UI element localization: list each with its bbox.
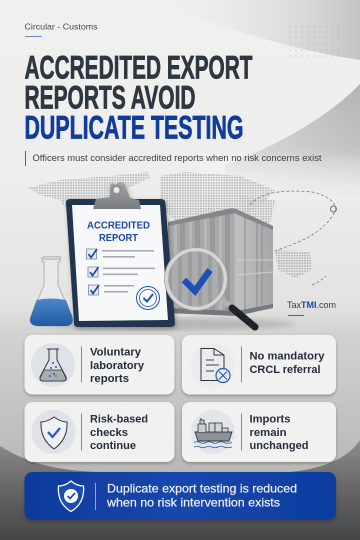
card: imports remain unchanged	[182, 402, 336, 462]
label: remain	[250, 427, 287, 439]
icon: cargo ship	[191, 410, 235, 454]
brand: TaxTMI.com	[287, 300, 336, 310]
label: Voluntary	[90, 346, 142, 358]
brand	[287, 300, 336, 316]
report heading	[87, 220, 150, 244]
dashed route	[250, 191, 336, 285]
banner text	[106, 482, 297, 510]
label: CRCL referral	[250, 364, 320, 376]
label: No mandatory	[250, 350, 325, 362]
icon: flask	[31, 343, 75, 387]
report heading: ACCREDITED	[87, 220, 150, 232]
title: DUPLICATE TESTING	[24, 110, 244, 146]
title: REPORTS AVOID	[24, 80, 196, 116]
stamp	[136, 286, 160, 310]
icon: document with cross	[191, 343, 235, 387]
card: no mandatory CRCL referral	[182, 335, 336, 394]
label: Risk-based	[90, 414, 148, 426]
magnifying glass	[164, 248, 255, 327]
card: voluntary laboratory reports	[24, 335, 174, 394]
icon: white shield	[58, 481, 84, 512]
title	[24, 50, 253, 146]
label	[90, 346, 145, 385]
card: risk-based checks continue	[24, 402, 174, 462]
label: reports	[90, 373, 129, 385]
clip	[93, 182, 141, 209]
icon: shield	[32, 410, 76, 454]
label: checks	[90, 427, 128, 439]
banner text: when no risk intervention exists	[106, 496, 280, 510]
flask illustration	[30, 256, 73, 326]
label: unchanged	[250, 440, 309, 452]
banner text: Duplicate export testing is reduced	[107, 482, 297, 496]
label	[90, 414, 148, 452]
report heading: REPORT	[99, 233, 138, 244]
shipping container	[168, 208, 273, 316]
label: Imports	[250, 414, 290, 426]
label: continue	[90, 440, 136, 452]
paper	[72, 205, 168, 321]
tag line: Circular - Customs	[24, 22, 98, 32]
clipboard	[66, 182, 175, 327]
label: laboratory	[90, 360, 145, 372]
label	[250, 414, 309, 452]
checklist	[86, 249, 155, 295]
label	[250, 350, 325, 376]
subtitle: Officers must consider accredited reports when no risk concerns exist	[32, 153, 322, 163]
tag line	[24, 22, 98, 37]
floor shadow	[45, 318, 295, 330]
world map dots	[28, 172, 312, 278]
banner	[24, 472, 336, 520]
